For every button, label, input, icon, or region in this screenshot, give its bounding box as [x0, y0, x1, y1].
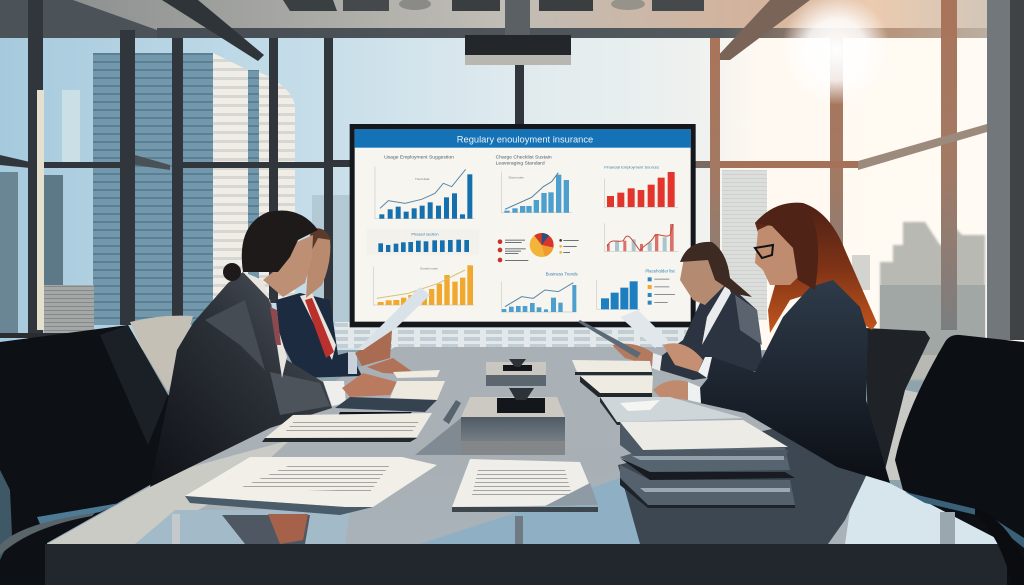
table window reflection left [135, 510, 350, 544]
chart: red bars [604, 165, 678, 207]
documents right near screen [572, 360, 653, 397]
chart: orange bars: Growth notes [420, 266, 438, 270]
red tie [305, 298, 334, 358]
grey suit body [150, 272, 332, 487]
chart: blue bars with line [375, 155, 474, 219]
large document front left [185, 457, 437, 515]
chart: blue bars with legend [597, 269, 675, 309]
chart: red bars: Financial Employment Sources [604, 165, 659, 170]
hand [612, 344, 653, 366]
head [306, 231, 330, 298]
chair arm left [0, 503, 120, 555]
cuff [652, 353, 662, 371]
face [680, 258, 725, 305]
suit [700, 280, 890, 483]
hair bun [223, 263, 241, 281]
chair: large dark chair left [0, 325, 265, 585]
presentation screen [350, 124, 696, 327]
cuffs [688, 382, 701, 403]
screen frame [350, 124, 696, 327]
sleeve cuff [348, 352, 357, 374]
stack of reports [620, 420, 795, 508]
person: woman with red hair [653, 203, 890, 483]
hair [680, 242, 752, 297]
pen [443, 400, 461, 424]
person: woman with ponytail [612, 242, 763, 380]
table [45, 347, 1007, 585]
hands [653, 380, 688, 400]
table blue reflection centre [420, 470, 640, 544]
window sky background [0, 0, 1024, 350]
collar [702, 283, 731, 345]
papers held by woman [578, 310, 668, 358]
chart: light blue bars with line: Chart notes [508, 175, 524, 179]
glasses [755, 245, 773, 258]
navy suit body [276, 293, 362, 378]
chair: large dark chair right [895, 335, 1024, 585]
hair back [755, 203, 877, 333]
sun glare [781, 0, 891, 105]
hair front [755, 203, 818, 290]
projector [465, 0, 571, 65]
chart: blue bars and line lower [502, 271, 578, 312]
background low city behind the table [335, 322, 708, 348]
chart: light blue bars with line: Leaveraging Standard [496, 161, 545, 167]
ceiling [0, 0, 1024, 61]
raised hand [355, 330, 392, 366]
back box device [486, 359, 546, 386]
table light wedge left [47, 440, 290, 544]
chart: small blue bars: Phased section [411, 231, 439, 236]
chart: blue bars with legend: Placeholder list [645, 269, 675, 274]
reflection of man in table [222, 514, 310, 544]
hair [242, 210, 318, 272]
shirt collar [243, 272, 287, 378]
chair: mid dark chair right [865, 328, 930, 470]
chart: red line with pale bars [604, 223, 678, 251]
documents left back stack [335, 370, 445, 416]
screen header bar: Regulary enouloyment insurance [457, 134, 593, 144]
document right middle [600, 397, 743, 425]
hand [342, 373, 397, 397]
table light reflection right [845, 472, 1007, 544]
chart: light blue bars with line: Charge Checklist Sustain [496, 154, 552, 160]
chair arm right [905, 492, 1024, 585]
chart: blue bars with line: Trend data [415, 177, 430, 181]
table front edge [45, 544, 1007, 585]
screen panel [355, 129, 691, 322]
sleeve highlight [270, 372, 330, 415]
face [755, 222, 800, 285]
floor behind right [880, 385, 930, 480]
paper held by man [357, 287, 430, 350]
person: man in navy suit [276, 228, 417, 378]
shirt [300, 293, 336, 360]
person: man in grey suit foreground [150, 210, 397, 487]
tie [270, 307, 281, 345]
suit [660, 283, 763, 380]
chart: blue bars and line lower: Business Trends [546, 271, 578, 276]
window frames [0, 0, 1024, 340]
document front centre [452, 459, 598, 512]
chart: blue bars with line: Usage Employment Suggestion [384, 155, 454, 161]
screen header bar [355, 129, 691, 148]
centre box device [415, 388, 565, 455]
chart: light blue bars with line [496, 154, 572, 213]
lower hand [367, 358, 417, 375]
document middle left [262, 413, 432, 442]
cuff [323, 381, 346, 406]
chart: small blue bars [367, 229, 479, 255]
chair: light back chair left [130, 316, 193, 392]
chart: orange bars [373, 265, 474, 305]
chart: pie [498, 233, 579, 262]
city buildings right [722, 170, 985, 380]
city buildings left [0, 53, 350, 337]
face [263, 235, 313, 297]
table dark reflection right [618, 427, 868, 544]
